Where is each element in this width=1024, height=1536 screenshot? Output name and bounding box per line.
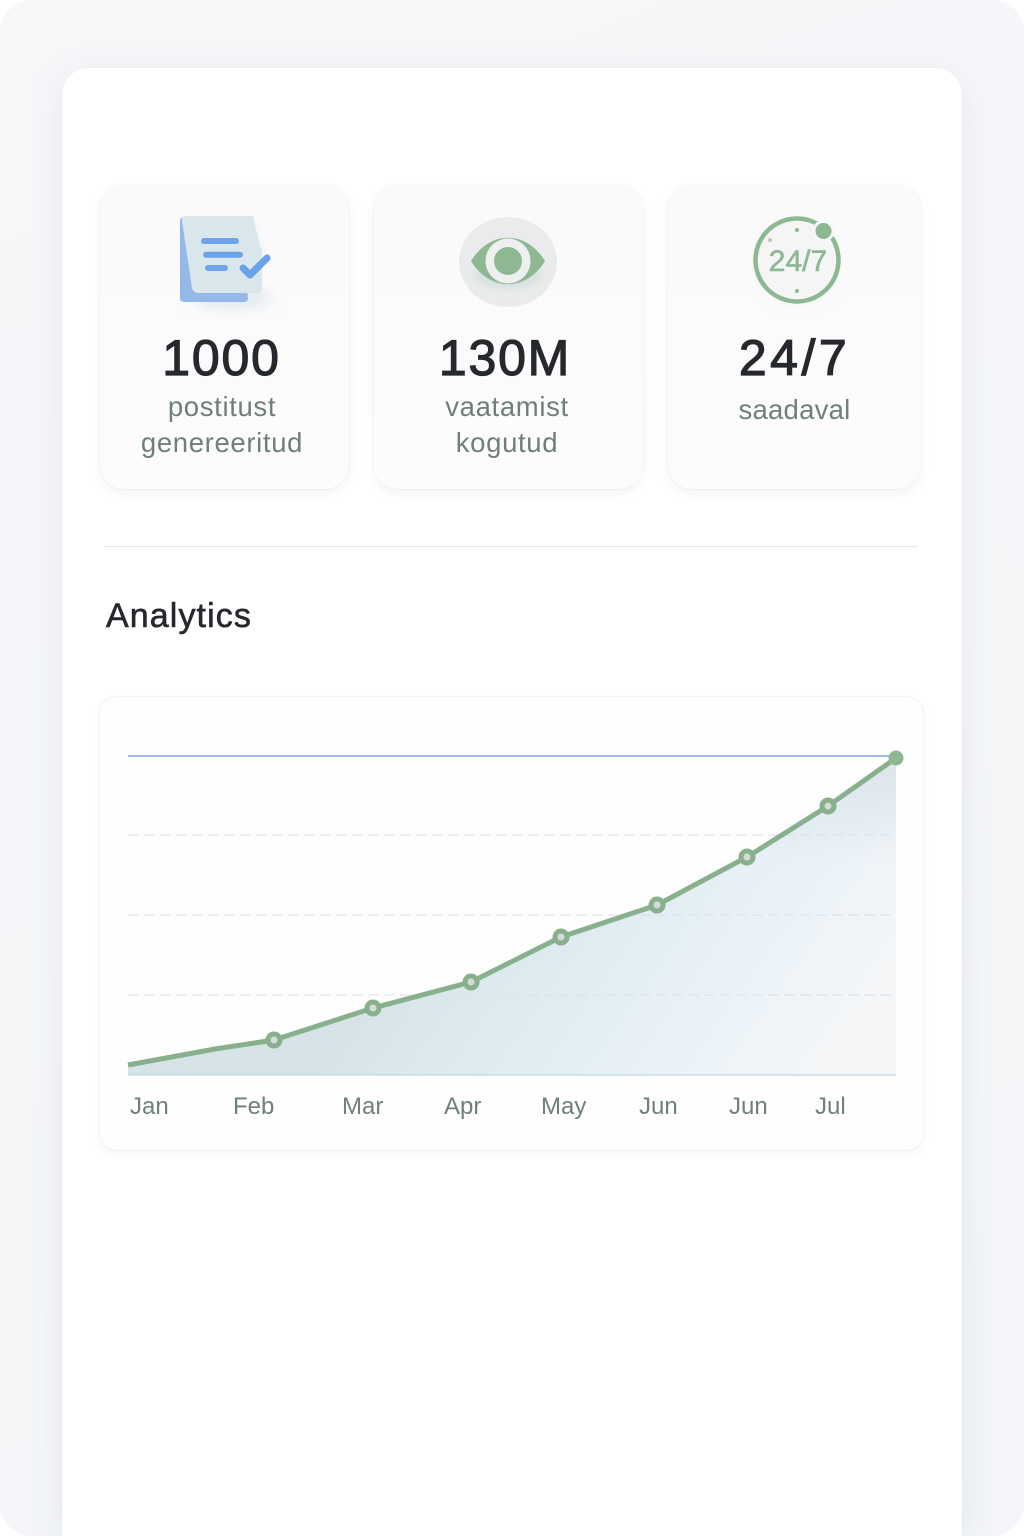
- line chart: [128, 750, 904, 1076]
- stat label: vaatamist kogutud: vaatamist: [445, 391, 569, 422]
- data line: [128, 758, 896, 1065]
- stat label: postitust genereeritud: genereeritud: [141, 427, 303, 458]
- stat label: saadaval: saadaval: [738, 394, 851, 425]
- x axis label: Jun: Jun: [729, 1093, 768, 1120]
- stat label: vaatamist kogutud: [445, 391, 569, 458]
- stat card: posts generated: [100, 185, 349, 489]
- heading: Analytics: Analytics: [106, 597, 252, 635]
- icon: eye: [459, 217, 557, 307]
- x axis label: Jun: Jun: [639, 1093, 678, 1120]
- icon: 24/7 clock: [756, 218, 838, 302]
- x axis label: Feb: Feb: [233, 1093, 274, 1120]
- dashed grid lines: [128, 835, 896, 995]
- stat card: availability: [668, 185, 921, 489]
- icon: document with check: [180, 216, 272, 309]
- x axis label: Apr: Apr: [444, 1093, 481, 1120]
- top reference line: [128, 755, 896, 757]
- divider: [104, 546, 918, 547]
- data points: [268, 750, 904, 1046]
- stat value: 1000: 1000: [162, 330, 281, 386]
- x axis label: Jan: Jan: [130, 1093, 169, 1120]
- panel: chart card: [100, 697, 923, 1150]
- baseline: [128, 1074, 896, 1076]
- stat value: 130M: 130M: [439, 330, 571, 386]
- clock label: 24/7: [769, 245, 827, 278]
- x axis label: Jul: Jul: [815, 1093, 846, 1120]
- area fill: [128, 758, 896, 1075]
- stat card: views collected: [374, 185, 643, 489]
- x axis label: Mar: Mar: [342, 1093, 383, 1120]
- icons layer: [180, 216, 841, 312]
- stat label: postitust genereeritud: postitust: [168, 391, 276, 422]
- stat label: vaatamist kogutud: kogutud: [456, 427, 558, 458]
- stat label: postitust genereeritud: [141, 391, 303, 458]
- stat value: 24/7: 24/7: [739, 330, 850, 386]
- x axis label: May: May: [541, 1093, 586, 1120]
